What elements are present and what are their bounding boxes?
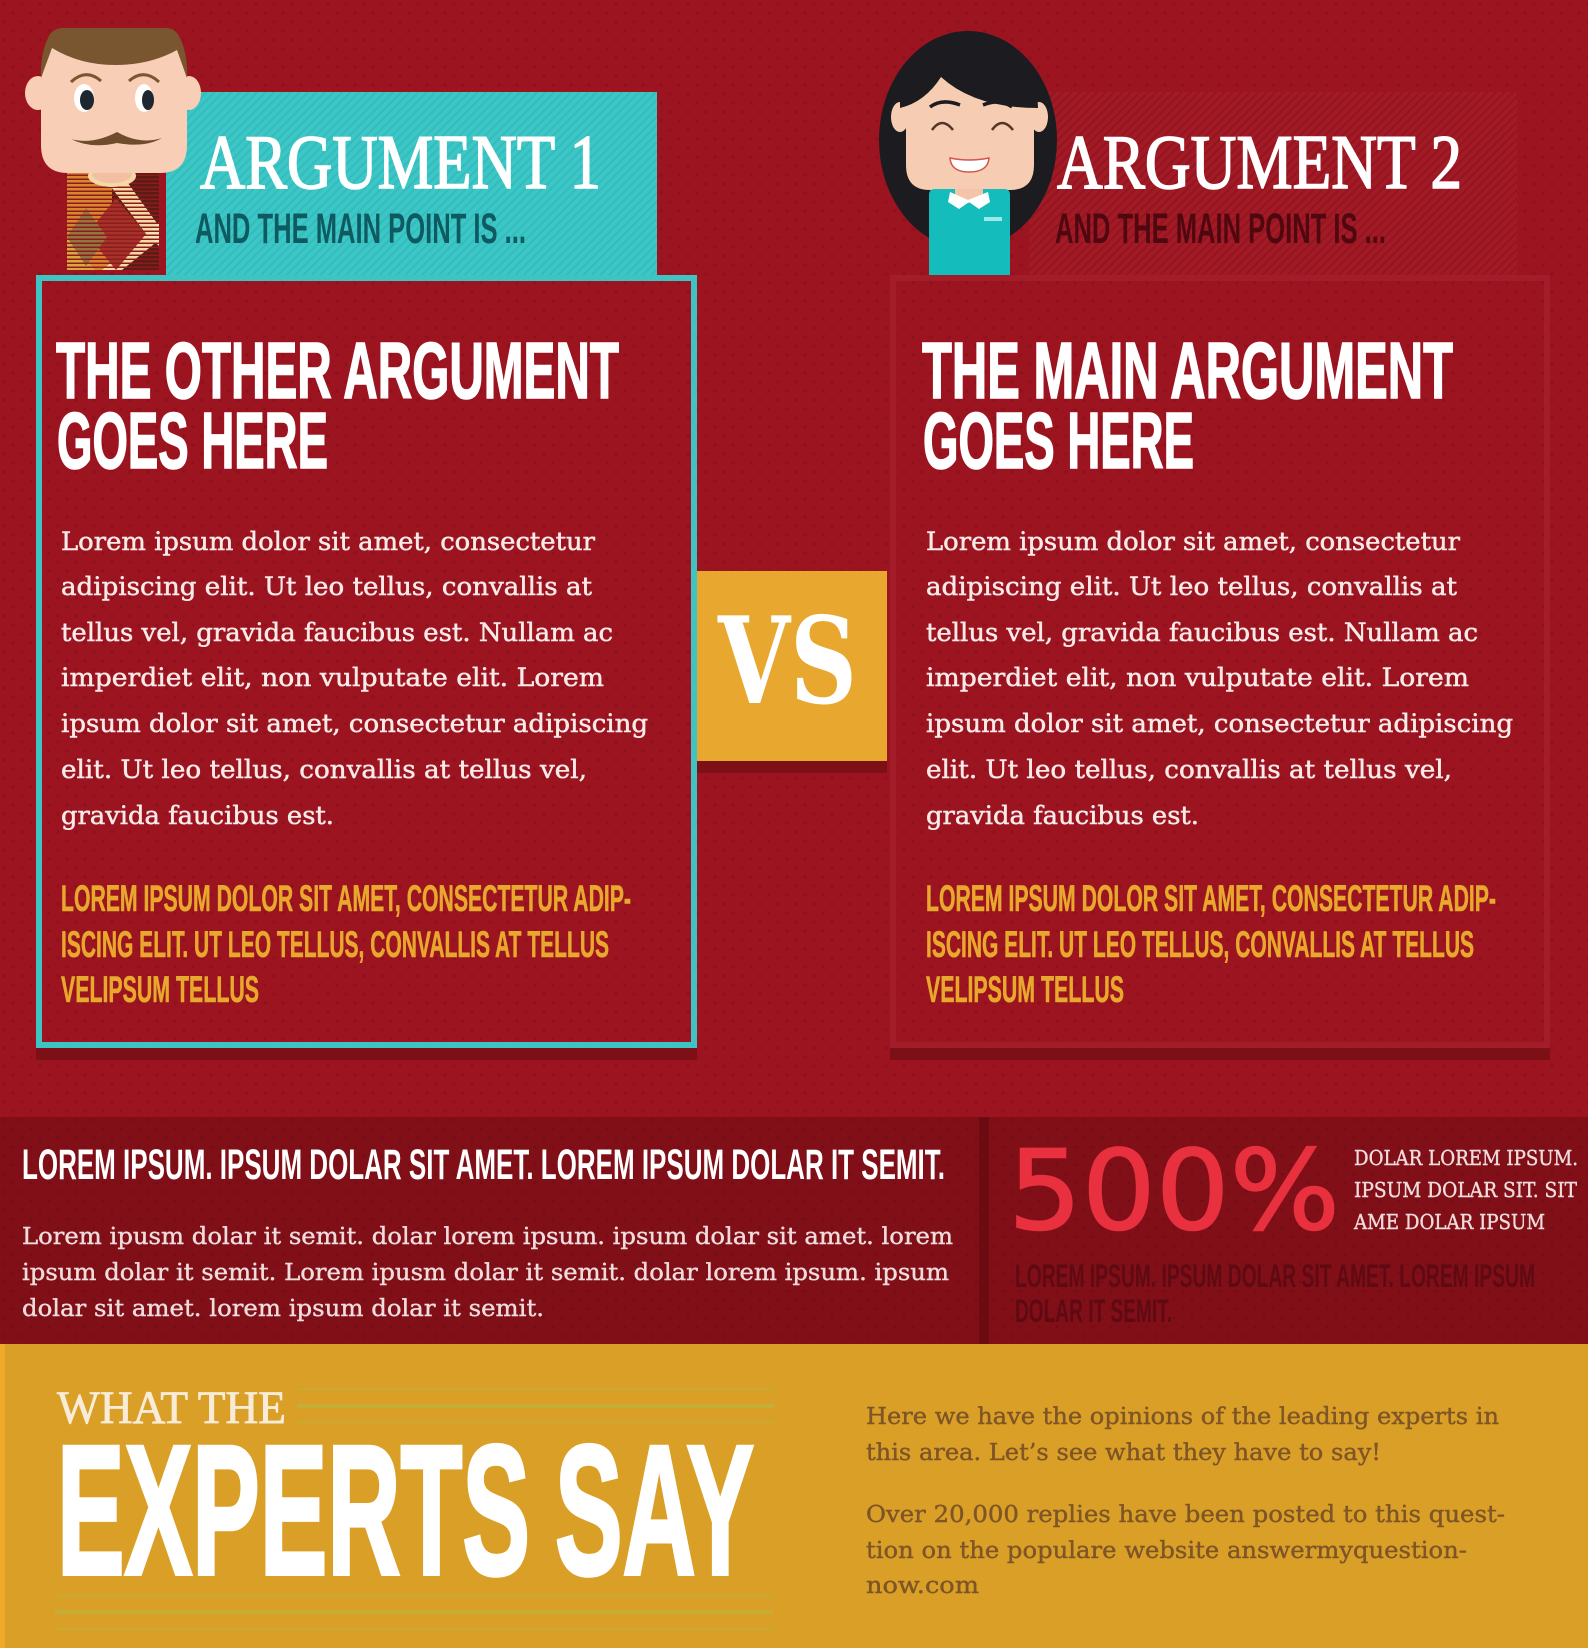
text block: other argument highlight: LOREM IPSUM DOLOR SIT AMET, CONSECTETUR ADIP- [61, 878, 631, 919]
heading: experts say: EXPERTS [57, 1408, 530, 1614]
text block: other argument body: elit. Ut leo tellus, convallis at tellus vel, [61, 755, 587, 784]
text block: main argument body: imperdiet elit, non vulputate elit. Lorem [926, 663, 1469, 692]
text block: statistic caption [1353, 1146, 1578, 1234]
VS badge [697, 571, 887, 773]
text block: strip body: dolar sit amet. lorem ipsum dolar it semit. [22, 1296, 544, 1322]
text block: main argument body: tellus vel, gravida faucibus est. Nullam ac [926, 618, 1478, 647]
subheading: argument 1: AND THE MAIN POINT IS ... [195, 205, 526, 253]
panel: argument 1 banner [158, 92, 657, 275]
heading: argument 1: ARGUMENT 1 [200, 119, 601, 205]
text block: other argument highlight: ISCING ELIT. UT LEO TELLUS, CONVALLIS AT TELLUS [61, 924, 609, 965]
text block: strip body: ipsum dolar it semit. Lorem ipusm dolar it semit. dolar lorem ipsum. ipsum [22, 1260, 949, 1286]
text block: main argument body: elit. Ut leo tellus, convallis at tellus vel, [926, 755, 1452, 784]
text block: other argument body: ipsum dolor sit amet, consectetur adipiscing [61, 709, 648, 738]
panel: argument 2 banner [1029, 92, 1517, 275]
heading: what the: WHAT THE [57, 1382, 286, 1434]
text block: other argument body: adipiscing elit. Ut leo tellus, convallis at [61, 572, 592, 601]
icon: man character [25, 28, 201, 270]
text block: experts intro: tion on the populare website answermyquestion- [866, 1538, 1467, 1564]
text block: main argument body: Lorem ipsum dolor sit amet, consectetur [926, 527, 1460, 556]
heading: experts say: SAY [555, 1408, 754, 1614]
text block: strip body [22, 1224, 953, 1322]
text block: other argument body: imperdiet elit, non vulputate elit. Lorem [61, 663, 604, 692]
text block: other argument body: gravida faucibus est. [61, 801, 334, 830]
text block: experts intro: this area. Let’s see what they have to say! [866, 1440, 1381, 1466]
heading: main argument [922, 326, 1453, 485]
text block: statistic note [1015, 1258, 1535, 1329]
text block: other argument body [61, 527, 648, 830]
heading: other argument: THE OTHER ARGUMENT [56, 326, 619, 415]
heading: main argument: GOES HERE [923, 396, 1194, 485]
heading: other argument: GOES HERE [57, 396, 328, 485]
heading: other argument [56, 326, 619, 485]
heading: strip: LOREM IPSUM. IPSUM DOLAR SIT AMET. LOREM IPSUM DOLAR IT SEMIT. [22, 1141, 945, 1189]
text block: statistic note: DOLAR IT SEMIT. [1015, 1293, 1172, 1329]
panel: other argument box [36, 278, 697, 1060]
panel: statistics strip [0, 1117, 1588, 1345]
text block: main argument body [926, 527, 1513, 830]
text block: experts intro: Over 20,000 replies have been posted to this quest- [866, 1502, 1505, 1528]
text block: main argument body: ipsum dolor sit amet, consectetur adipiscing [926, 709, 1513, 738]
panel: experts section [0, 1344, 1588, 1648]
text block: other argument body: tellus vel, gravida faucibus est. Nullam ac [61, 618, 613, 647]
icon: woman character [879, 31, 1057, 275]
heading: argument 2: ARGUMENT 2 [1057, 119, 1462, 205]
text block: main argument highlight: VELIPSUM TELLUS [926, 969, 1124, 1010]
text block: experts intro: Here we have the opinions of the leading experts in [866, 1404, 1499, 1430]
text block: strip body: Lorem ipusm dolar it semit. dolar lorem ipsum. ipsum dolar sit amet. lorem [22, 1224, 953, 1250]
VS badge: VS [717, 591, 857, 732]
text block: statistic caption: AME DOLAR IPSUM [1353, 1210, 1545, 1234]
text block: experts intro: now.com [866, 1573, 979, 1599]
text block: main argument body: gravida faucibus est. [926, 801, 1199, 830]
text block: other argument body: Lorem ipsum dolor sit amet, consectetur [61, 527, 595, 556]
text block: other argument highlight [61, 878, 631, 1010]
statistic: 500%: 500% [1008, 1127, 1340, 1256]
panel: main argument box [890, 278, 1550, 1060]
text block: experts intro [866, 1404, 1505, 1599]
text block: main argument body: adipiscing elit. Ut leo tellus, convallis at [926, 572, 1457, 601]
text block: main argument highlight [926, 878, 1496, 1010]
text block: other argument highlight: VELIPSUM TELLUS [61, 969, 259, 1010]
